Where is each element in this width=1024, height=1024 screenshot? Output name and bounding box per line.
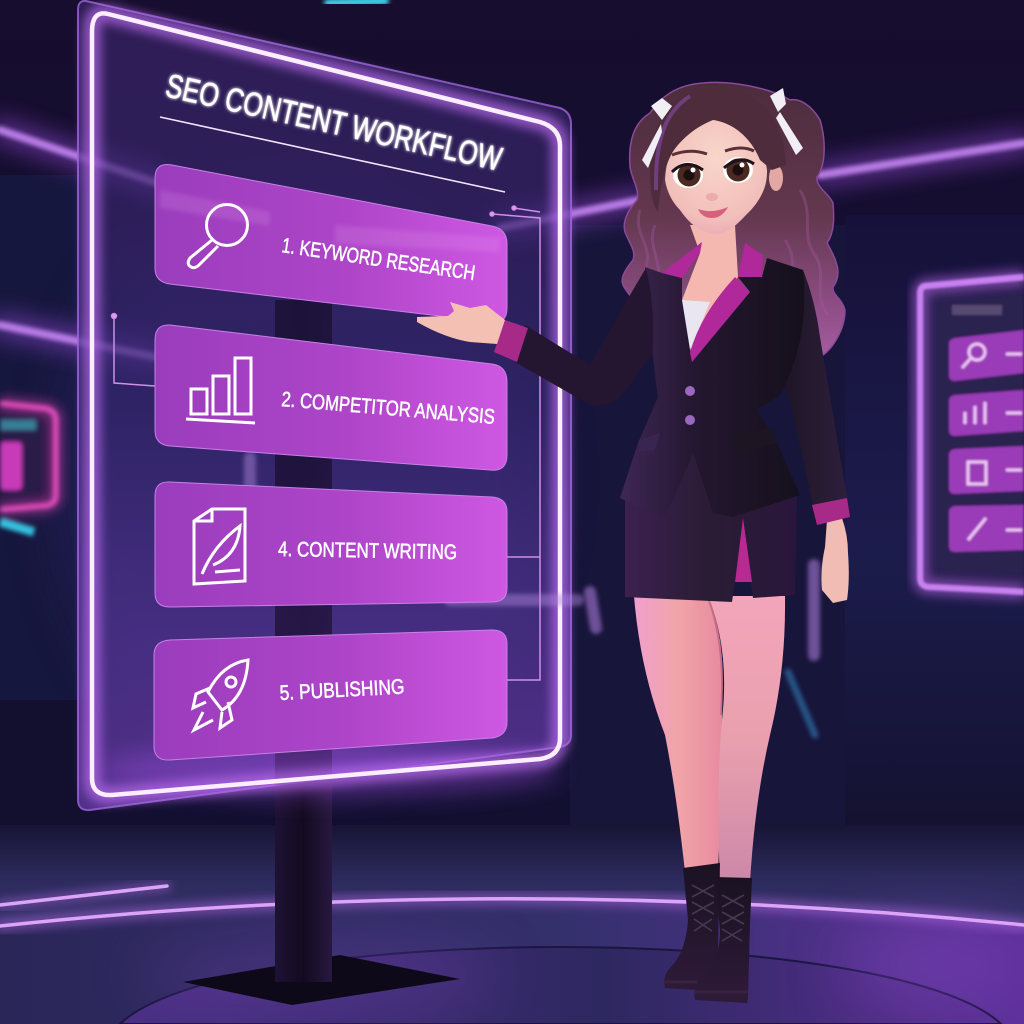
- display stand: [183, 300, 460, 1005]
- skirt: [625, 440, 797, 602]
- boots: [664, 863, 752, 1003]
- mini cards: [949, 330, 1024, 552]
- neon frame: [92, 13, 560, 795]
- face: [665, 118, 767, 234]
- right sleeve: [770, 262, 847, 505]
- white top: [682, 300, 710, 350]
- step card 4: 5. PUBLISHING: [279, 675, 405, 705]
- nose and mouth: [698, 193, 728, 218]
- connector lines: [112, 206, 540, 680]
- lapels: [662, 242, 702, 278]
- buttons and pockets: [685, 386, 695, 396]
- light bars seen through glass: [250, 458, 578, 600]
- hair strands: [638, 190, 828, 360]
- hair back: [622, 82, 845, 385]
- icon: magnifying glass: [188, 204, 248, 268]
- icon: rocket: [193, 660, 248, 730]
- step card 2: 2. COMPETITOR ANALYSIS: [281, 388, 496, 429]
- blazer torso: [620, 258, 804, 517]
- step card 3: [155, 482, 507, 607]
- right hand: [821, 518, 849, 603]
- floor: [0, 825, 1024, 1024]
- pointing hand: [417, 302, 505, 344]
- icon: document with quill: [194, 509, 245, 584]
- ear: [769, 165, 783, 191]
- step card 3: 4. CONTENT WRITING: [278, 538, 457, 564]
- character: [417, 82, 850, 1003]
- eyes: [672, 148, 754, 188]
- step card 4: [154, 630, 507, 760]
- step card 1: 1. KEYWORD RESEARCH: [280, 234, 477, 285]
- neck and chest: [682, 225, 738, 352]
- pointing arm: [515, 268, 653, 406]
- left background neon panel: [0, 403, 56, 532]
- step card 2: [155, 325, 507, 470]
- icon: bar chart: [186, 358, 255, 423]
- legs: [634, 596, 785, 882]
- step card 1: [155, 165, 507, 322]
- title: SEO CONTENT WORKFLOW: [162, 67, 506, 178]
- hair fringe: [650, 88, 786, 212]
- stand base: [183, 955, 460, 1005]
- right background neon panel: [918, 272, 1024, 596]
- hair bows: [642, 88, 803, 168]
- stand pole: [275, 300, 332, 982]
- panel: glass board: [78, 1, 578, 810]
